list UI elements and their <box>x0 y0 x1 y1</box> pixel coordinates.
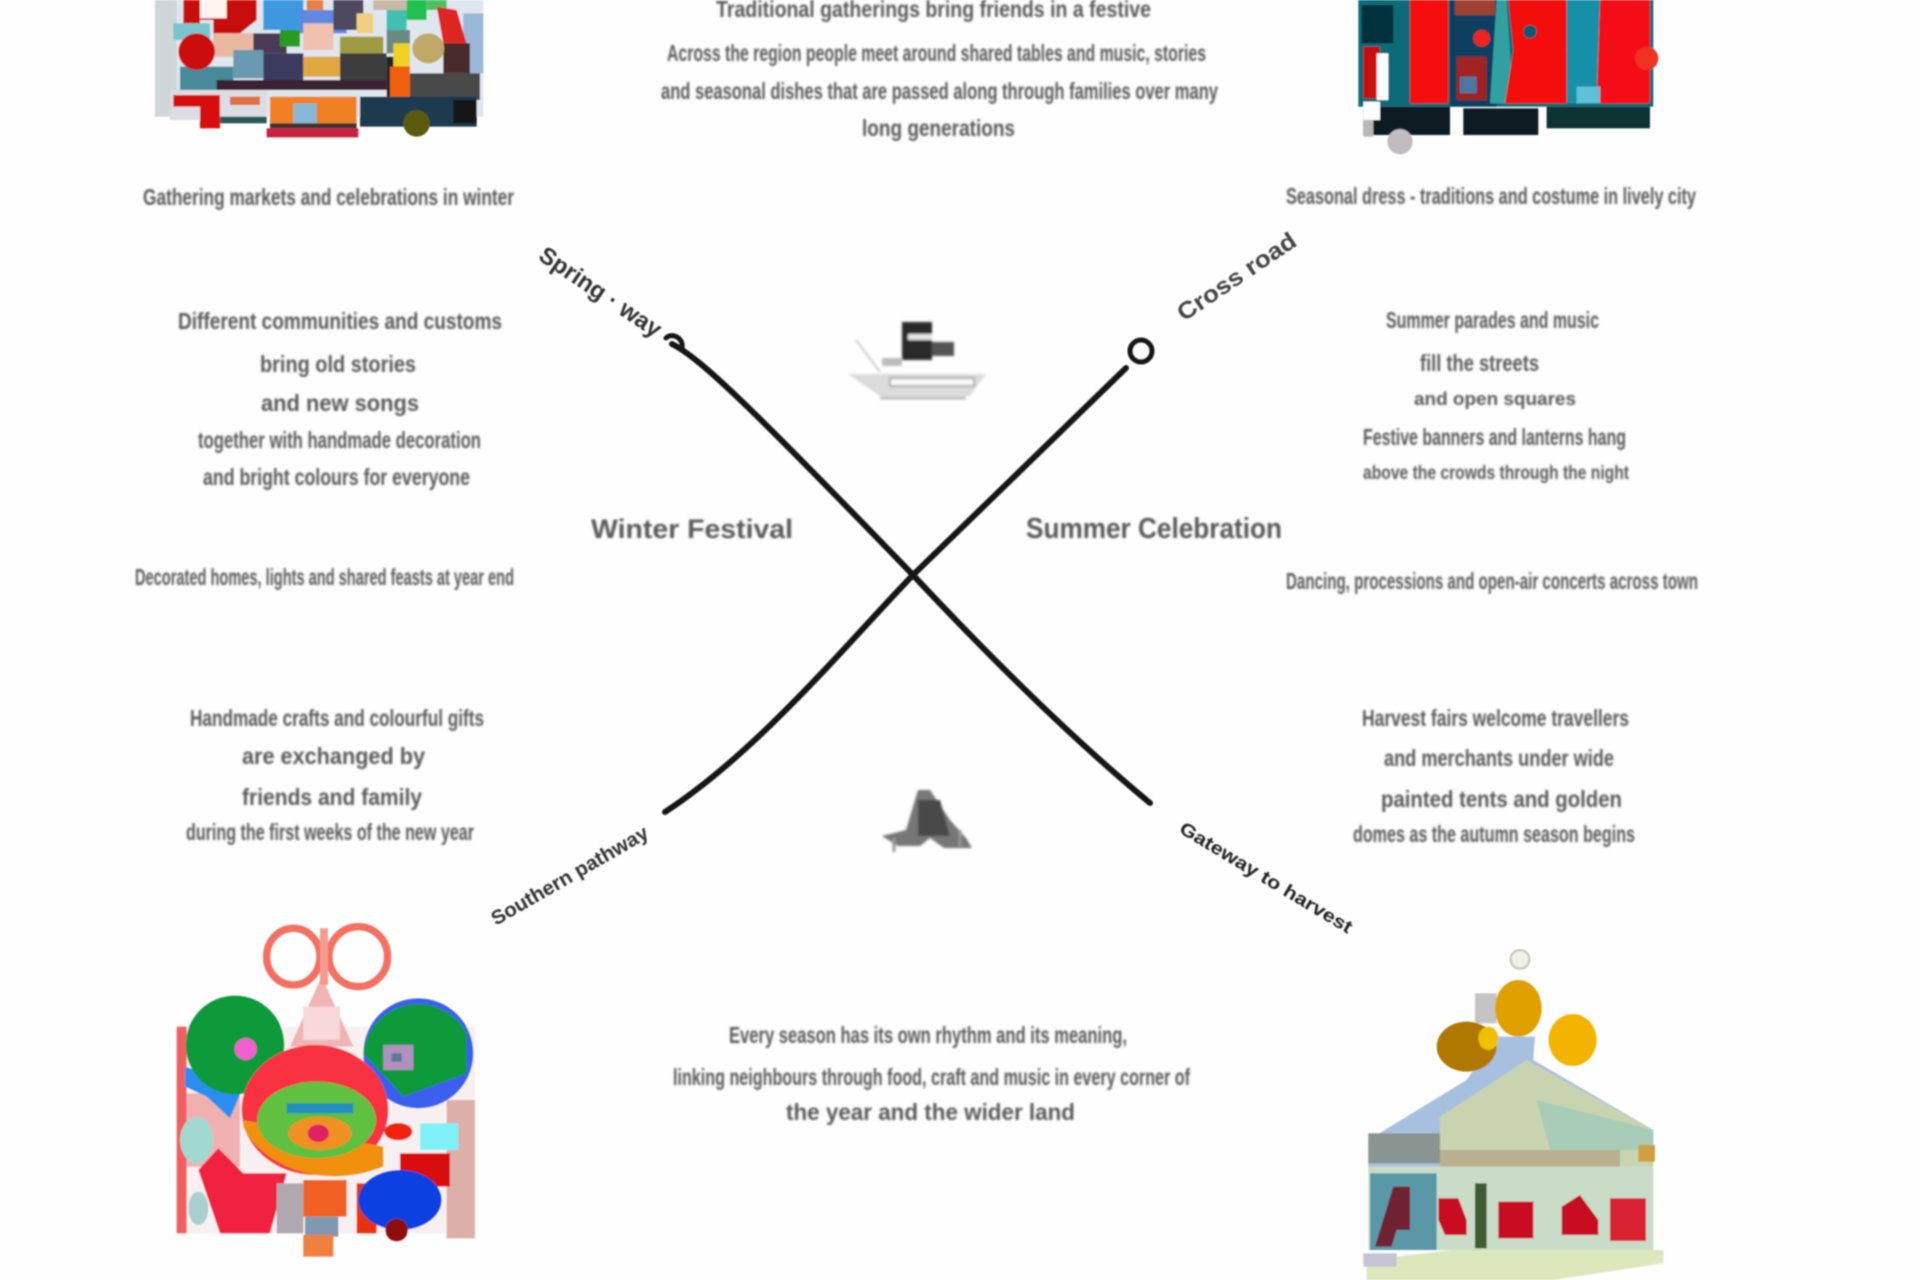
right lower text block <box>1353 705 1635 847</box>
right lower text block: and merchants under wide <box>1384 745 1614 771</box>
image: top-left festive scene <box>155 0 483 137</box>
image: bottom-left colourful gift with bow <box>177 927 475 1257</box>
top-right caption: Seasonal dress - traditions and costume in lively city <box>1286 183 1696 209</box>
right lower text block: domes as the autumn season begins <box>1353 821 1635 847</box>
diagonal label: top-right: Cross road <box>1172 227 1302 327</box>
line: top-right to bottom-left <box>665 368 1126 812</box>
hook: top-left curl <box>666 336 682 348</box>
left upper text block: and bright colours for everyone <box>203 464 470 490</box>
icon: small mountain figure <box>882 790 972 852</box>
left lower text block <box>186 705 484 845</box>
icon: small boat <box>848 322 986 398</box>
right upper text block: Summer parades and music <box>1386 307 1599 333</box>
crossing lines <box>665 336 1152 812</box>
right upper text block: and open squares <box>1414 389 1576 409</box>
right middle caption: Dancing, processions and open-air concerts across town <box>1286 568 1698 594</box>
left lower text block: during the first weeks of the new year <box>186 819 474 845</box>
top-left caption: Gathering markets and celebrations in winter <box>143 184 514 210</box>
right upper text block: Festive banners and lanterns hang <box>1363 424 1626 450</box>
top centre text block: Across the region people meet around shared tables and music, stories <box>667 40 1206 66</box>
left heading: Winter Festival <box>591 514 793 544</box>
left middle caption: Decorated homes, lights and shared feasts at year end <box>135 564 514 590</box>
right upper text block: above the crowds through the night <box>1363 463 1630 484</box>
right heading: Summer Celebration <box>1026 513 1282 545</box>
bottom centre text block: linking neighbours through food, craft and music in every corner of <box>673 1064 1190 1090</box>
line: top-left to bottom-right <box>672 344 1150 803</box>
bottom centre text block <box>673 1022 1190 1125</box>
right lower text block: painted tents and golden <box>1381 786 1622 812</box>
left lower text block: Handmade crafts and colourful gifts <box>190 705 484 731</box>
top centre text block: long generations <box>862 115 1015 141</box>
left lower text block: are exchanged by <box>242 743 425 769</box>
left upper text block: Different communities and customs <box>178 308 502 334</box>
bottom centre text block: Every season has its own rhythm and its meaning, <box>729 1022 1127 1048</box>
hook: top-right ring <box>1130 340 1152 362</box>
top centre text block: and seasonal dishes that are passed along through families over many <box>661 78 1218 104</box>
right upper text block <box>1363 307 1630 484</box>
left upper text block: together with handmade decoration <box>198 427 481 453</box>
image: bottom-right domed pavilion <box>1363 950 1663 1280</box>
left upper text block <box>178 308 502 490</box>
diagonal label: top-left: Spring · way <box>534 242 667 344</box>
left upper text block: and new songs <box>261 390 419 416</box>
diagonal label: bottom-left: Southern pathway <box>488 822 653 930</box>
left upper text block: bring old stories <box>260 351 416 377</box>
bottom centre text block: the year and the wider land <box>786 1099 1075 1125</box>
diagonal label: bottom-right: Gateway to harvest <box>1176 818 1356 937</box>
right upper text block: fill the streets <box>1420 350 1539 376</box>
top centre text block <box>661 0 1218 141</box>
left lower text block: friends and family <box>242 784 422 810</box>
image: top-right red and teal figures <box>1358 0 1658 154</box>
right lower text block: Harvest fairs welcome travellers <box>1362 705 1629 731</box>
